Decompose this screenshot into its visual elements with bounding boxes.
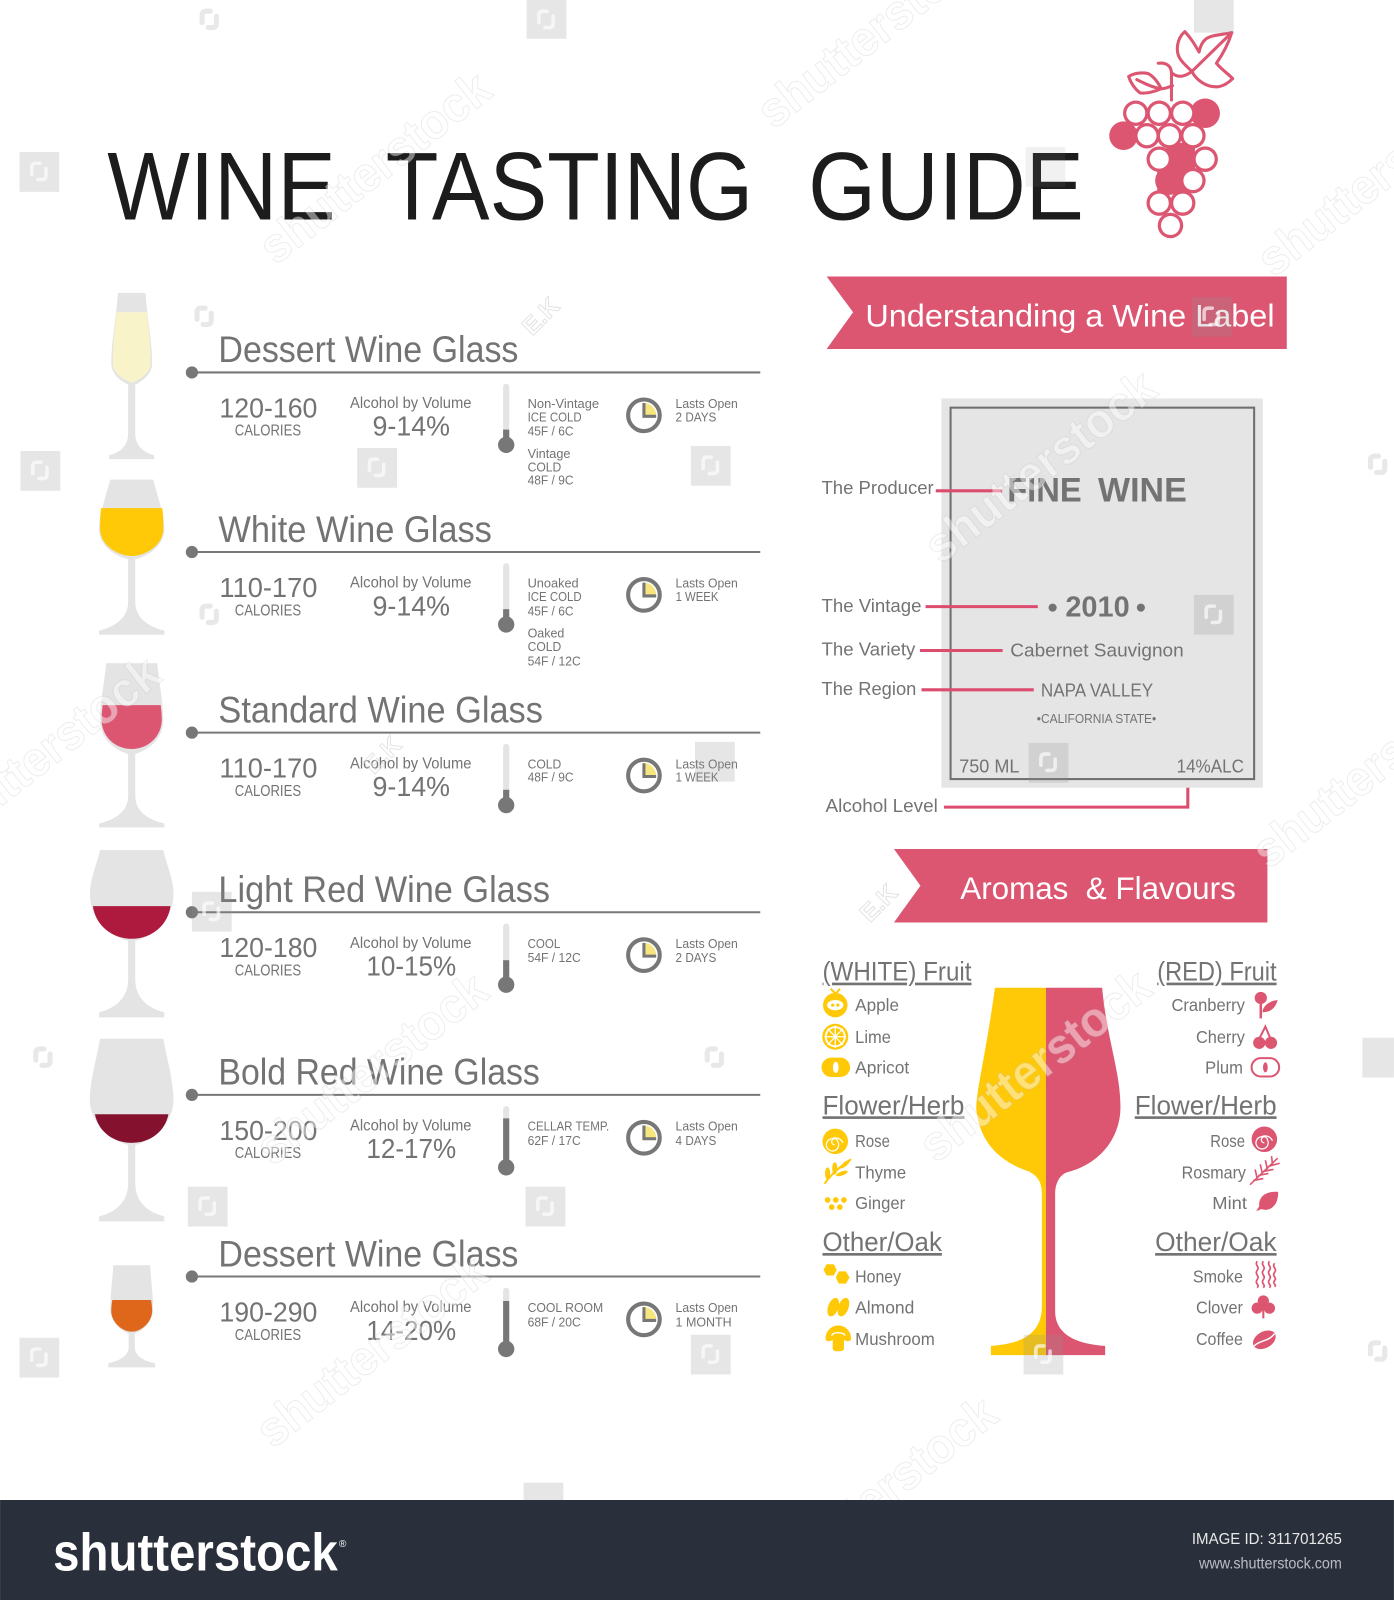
panel: bold red wine row: Bold Red Wine Glass <box>218 1052 540 1093</box>
panel: wine label diagram: WINE <box>1098 472 1187 510</box>
panel: light red wine row: 2 DAYS <box>676 950 717 965</box>
panel: dessert wine row: Non-Vintage <box>528 396 599 411</box>
title <box>107 131 1084 240</box>
panel: wine label diagram: FINE <box>1007 472 1082 510</box>
panel: white aromas list <box>823 957 972 1349</box>
panel: standard wine row: 1 WEEK <box>676 770 719 785</box>
panel: dessert wine row: 45F / 6C <box>528 424 574 439</box>
title: TASTING <box>386 131 753 240</box>
icon: dessert flute glass <box>109 293 154 459</box>
panel: white wine row: COLD <box>528 639 561 654</box>
watermark: author initials: E.K <box>359 731 407 780</box>
panel: white aromas list: Almond <box>855 1297 914 1317</box>
panel: dessert wine second row: 14-20% <box>366 1315 456 1346</box>
panel: dessert wine second row: 68F / 20C <box>528 1315 581 1330</box>
panel: bold red wine row: Lasts Open <box>676 1119 738 1134</box>
panel: light red wine row: CALORIES <box>235 963 301 980</box>
panel: white aromas list: Apple <box>855 995 899 1015</box>
watermark: author initials <box>359 293 903 928</box>
panel: dessert wine second row: 190-290 <box>219 1296 317 1327</box>
watermark: stock logos: shutterstock <box>909 959 1162 1172</box>
watermark: stock logos: shutterstock <box>246 1244 499 1458</box>
panel: white wine row: ICE COLD <box>528 589 582 604</box>
panel: wine label diagram: NAPA VALLEY <box>1041 679 1153 700</box>
panel: white aromas list: Thyme <box>855 1163 906 1183</box>
panel: dessert wine second row <box>186 1233 760 1357</box>
panel: red aromas list: Plum <box>1205 1057 1243 1077</box>
panel: red aromas list: Rose <box>1210 1131 1245 1151</box>
panel: standard wine row: CALORIES <box>235 783 301 800</box>
panel: white aromas list: Ginger <box>855 1193 905 1213</box>
panel: dessert wine second row: Lasts Open <box>676 1300 738 1315</box>
panel: light red wine row: Alcohol by Volume <box>350 935 472 952</box>
banner: understanding a wine label: Understanding a Wine Label <box>865 298 1275 334</box>
panel: dessert wine second row: Alcohol by Volume <box>350 1299 472 1316</box>
panel: bold red wine row: 12-17% <box>366 1133 456 1164</box>
panel: standard wine row: 110-170 <box>219 753 317 784</box>
watermark: stock logos: shutterstock <box>914 360 1167 574</box>
panel: dessert wine row: Alcohol by Volume <box>350 395 472 412</box>
panel: white aroma icons <box>821 989 852 1351</box>
icon: bold red wine glass <box>90 1039 174 1221</box>
panel: standard wine row: 9-14% <box>373 771 450 802</box>
panel: red aromas list: Cherry <box>1196 1027 1245 1047</box>
icon: grape bunch <box>1109 32 1233 238</box>
panel: dessert wine row <box>186 329 760 488</box>
watermark: stock logos: shutterstock <box>249 61 502 275</box>
panel: red aroma icons <box>1250 992 1280 1353</box>
panel: light red wine row: Light Red Wine Glass <box>218 869 550 910</box>
panel: light red wine row: Lasts Open <box>676 936 738 951</box>
panel: red aromas list: Other/Oak <box>1155 1227 1277 1257</box>
callouts: label parts: The Variety <box>821 639 916 660</box>
panel: light red wine row: 54F / 12C <box>528 950 581 965</box>
panel: bold red wine row: CELLAR TEMP. <box>528 1119 609 1134</box>
panel: red aromas list: Cranberry <box>1171 995 1245 1015</box>
callouts: label parts: The Region <box>821 678 916 699</box>
panel: bold red wine row: Alcohol by Volume <box>350 1118 472 1135</box>
panel: dessert wine row: Dessert Wine Glass <box>218 329 518 370</box>
panel: bold red wine row: 4 DAYS <box>676 1133 717 1148</box>
panel: light red wine row <box>186 869 760 993</box>
panel: white wine row <box>186 509 760 668</box>
panel: white aromas list: (WHITE) Fruit <box>823 957 972 987</box>
watermark: author initials: E.K <box>517 293 566 341</box>
panel: dessert wine second row: COOL ROOM <box>528 1300 603 1315</box>
callouts: label parts: The Vintage <box>821 595 921 616</box>
panel: dessert wine row: Lasts Open <box>676 396 738 411</box>
panel: dessert wine row: CALORIES <box>235 423 301 440</box>
watermark: author initials: E.K <box>855 879 903 928</box>
panel: white aromas list: Flower/Herb <box>823 1090 964 1120</box>
title: WINE <box>107 131 336 240</box>
callouts: label parts: The Producer <box>821 477 934 498</box>
icon: light red wine glass <box>90 850 174 1017</box>
icon: standard wine glass <box>99 663 164 828</box>
panel: red aromas list: Rosmary <box>1182 1163 1246 1183</box>
panel: white aromas list: Other/Oak <box>823 1227 943 1257</box>
footer bar <box>0 1500 1394 1600</box>
panel: standard wine row: 48F / 9C <box>528 770 574 785</box>
panel: white wine row: 110-170 <box>219 572 317 603</box>
watermark: stock logos: shutterstock <box>246 962 499 1176</box>
panel: wine label diagram <box>941 398 1263 788</box>
panel: wine label diagram: 2010 <box>1065 591 1130 623</box>
panel: standard wine row: Lasts Open <box>676 756 738 771</box>
panel: red aromas list: Flower/Herb <box>1135 1090 1277 1120</box>
panel: wine label diagram: 750 ML <box>959 755 1019 776</box>
panel: white wine row: CALORIES <box>235 602 301 619</box>
panel: white wine row: White Wine Glass <box>218 509 492 550</box>
icon: white wine glass <box>99 480 164 635</box>
panel: dessert wine row: 48F / 9C <box>528 473 574 488</box>
icon: dessert wine small glass <box>108 1265 155 1367</box>
panel: dessert wine row: Vintage <box>528 446 570 461</box>
banner: understanding a wine label <box>827 277 1287 349</box>
panel: dessert wine second row: Dessert Wine Glass <box>218 1233 518 1274</box>
panel: standard wine row: COLD <box>528 756 561 771</box>
footer image id: IMAGE ID: 311701265 <box>1192 1531 1342 1548</box>
panel: white aromas list: Lime <box>855 1027 891 1047</box>
panel: red aromas list: (RED) Fruit <box>1157 957 1277 987</box>
panel: standard wine row: Alcohol by Volume <box>350 755 472 772</box>
panel: wine label diagram: 14%ALC <box>1177 755 1244 776</box>
panel: white aromas list: Mushroom <box>855 1329 935 1349</box>
panel: white wine row: 45F / 6C <box>528 603 574 618</box>
panel: bold red wine row: 150-200 <box>219 1115 317 1146</box>
panel: bold red wine row: CALORIES <box>235 1145 301 1162</box>
footer registered mark: ® <box>339 1539 347 1550</box>
panel: white wine row: 1 WEEK <box>676 589 719 604</box>
panel: red aromas list <box>1135 957 1277 1349</box>
panel: red aromas list: Clover <box>1196 1297 1243 1317</box>
panel: dessert wine second row: 1 MONTH <box>676 1315 732 1330</box>
callouts: label parts <box>821 477 1188 816</box>
panel: dessert wine row: COLD <box>528 459 561 474</box>
panel: white wine row: Lasts Open <box>676 576 738 591</box>
panel: white wine row: 54F / 12C <box>528 653 581 668</box>
panel: white wine row: Oaked <box>528 626 564 641</box>
panel: wine label diagram: Cabernet Sauvignon <box>1010 640 1184 661</box>
panel: bold red wine row: 62F / 17C <box>528 1133 581 1148</box>
panel: white wine row: Unoaked <box>528 576 579 591</box>
panel: white wine row: 9-14% <box>373 590 450 621</box>
panel: red aromas list: Coffee <box>1196 1329 1243 1349</box>
panel: dessert wine row: 2 DAYS <box>676 409 717 424</box>
panel: wine label diagram: •CALIFORNIA STATE• <box>1037 711 1156 726</box>
panel: light red wine row: 10-15% <box>366 951 456 982</box>
panel: red aromas list: Mint <box>1212 1193 1247 1213</box>
panel: dessert wine row: ICE COLD <box>528 409 582 424</box>
footer url: www.shutterstock.com <box>1198 1555 1342 1572</box>
panel: white aromas list: Rose <box>855 1131 890 1151</box>
banner: aromas and flavours <box>894 849 1267 922</box>
banner: aromas and flavours: Aromas & Flavours <box>960 870 1236 906</box>
panel: white aromas list: Honey <box>855 1267 901 1287</box>
watermark: stock logos: shutterstock <box>755 1385 1008 1599</box>
title: GUIDE <box>808 131 1084 240</box>
panel: white wine row: Alcohol by Volume <box>350 575 472 592</box>
callouts: label parts: Alcohol Level <box>826 795 938 816</box>
panel: light red wine row: COOL <box>528 936 560 951</box>
panel: dessert wine row: 9-14% <box>373 411 450 442</box>
panel: red aromas list: Smoke <box>1193 1267 1243 1287</box>
panel: dessert wine second row: CALORIES <box>235 1327 301 1344</box>
panel: bold red wine row <box>186 1052 760 1176</box>
panel: standard wine row: Standard Wine Glass <box>218 689 543 730</box>
panel: standard wine row <box>186 689 760 813</box>
chart: split wine glass <box>976 988 1120 1355</box>
footer logo: shutterstock <box>53 1523 338 1582</box>
panel: white aromas list: Apricot <box>855 1057 909 1077</box>
panel: dessert wine row: 120-160 <box>219 392 317 423</box>
panel: light red wine row: 120-180 <box>219 932 317 963</box>
